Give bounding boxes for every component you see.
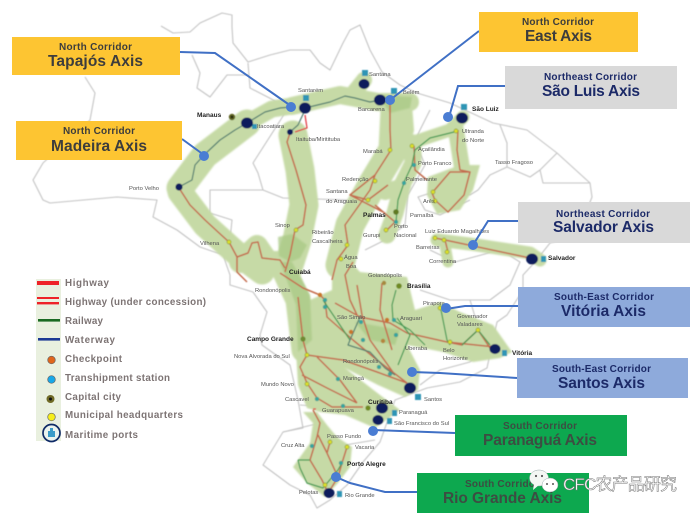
legend: maritime ports (43, 424, 139, 442)
place names: Cuiabá (289, 269, 311, 276)
highways (179, 102, 530, 493)
label: Madeira Axis: North Corridor (63, 126, 135, 137)
label: Paranaguá Axis: South Corridor (503, 421, 577, 432)
small red highway stub (295, 115, 316, 409)
place names: Parnaíba (410, 213, 434, 219)
place names: Nova Alvorada do Sul (234, 354, 290, 360)
place names: Passo Fundo (327, 434, 361, 440)
legend: highway: Highway (65, 278, 110, 289)
place names: Brasília (407, 283, 431, 290)
legend: waterway (38, 335, 116, 346)
place names: São Francisco do Sul (394, 421, 449, 427)
place names: Cascavel (285, 397, 309, 403)
label: Salvador Axis: Northeast Corridor (556, 209, 650, 220)
label: Paranaguá Axis: Paranaguá Axis (483, 432, 597, 449)
label: Rio Grande Axis: South Corridor (465, 479, 539, 490)
place names: Palmas (363, 212, 386, 219)
label: Madeira Axis (16, 121, 182, 160)
place names: São Simão (337, 315, 365, 321)
place names: Porto Franco (418, 161, 452, 167)
transhipment dots (310, 163, 416, 465)
legend: highway under concession: Highway (under concession) (65, 297, 206, 308)
place names: Boa (346, 264, 357, 270)
label: Paranaguá Axis (455, 415, 627, 456)
place names: Campo Grande (247, 336, 294, 343)
place names: Horizonte (443, 356, 468, 362)
place names: Vacaria (355, 445, 375, 451)
place names: Valadares (457, 322, 483, 328)
place names: Paranaguá (399, 410, 428, 416)
place names: Belo (443, 348, 455, 354)
place names: Itaituba/Miritituba (296, 137, 341, 143)
state borders (33, 13, 592, 508)
watermark text: CFC农产品研究 (563, 475, 677, 494)
place names: Goiandópolis (368, 273, 402, 279)
legend: municipal headquarters: Municipal headquarters (65, 410, 184, 421)
legend: capital city: Capital city (65, 392, 122, 403)
label: Santos Axis: Santos Axis (558, 375, 645, 392)
place names: Vitória (512, 350, 532, 357)
legend: checkpoint: Checkpoint (65, 354, 123, 365)
navy port dots (175, 79, 538, 498)
place names: Rio Grande (345, 493, 375, 499)
place names: Itacoatiara (257, 124, 285, 130)
label: East Axis: East Axis (525, 28, 592, 45)
map of Brazil (33, 13, 592, 508)
place names: Sinop (275, 223, 290, 229)
municipal dots (227, 129, 480, 487)
place names: Governador (457, 314, 488, 320)
place names: Porto Velho (129, 186, 159, 192)
place names: São Luiz (472, 106, 499, 113)
corridor bands (180, 80, 540, 497)
label: Tapajós Axis: Tapajós Axis (48, 53, 143, 70)
label: São Luis Axis (505, 66, 677, 109)
connector lines (180, 31, 518, 492)
label: Tapajós Axis (12, 37, 180, 75)
label: São Luis Axis: Northeast Corridor (544, 72, 637, 83)
place names: Porto (394, 224, 408, 230)
place names: Correntina (429, 259, 457, 265)
place names: Pelotas (299, 490, 318, 496)
place names: Cascalheira (312, 239, 343, 245)
legend: highway (37, 278, 110, 289)
place names: Ribeirão (312, 230, 334, 236)
place names: Rondonópolis (343, 359, 379, 365)
legend: railway: Railway (65, 316, 104, 327)
place names: Santana (326, 189, 348, 195)
place names: Guarapuava (322, 408, 355, 414)
place names: Açailândia (418, 147, 446, 153)
place names: Manaus (197, 112, 222, 119)
place names: Araguari (400, 316, 422, 322)
place names: Nacional (394, 233, 417, 239)
place names: do Norte (462, 138, 484, 144)
place names: Rondonópolis (255, 288, 291, 294)
place names: Maringá (343, 376, 365, 382)
label: Rio Grande Axis (417, 473, 589, 513)
railways (298, 131, 490, 488)
place names: Marabá (363, 149, 383, 155)
label: Santos Axis (517, 358, 688, 398)
place names: Mundo Novo (261, 382, 294, 388)
label: Vitória Axis (518, 287, 690, 327)
legend: railway (38, 316, 104, 327)
place names: Barreiras (416, 245, 440, 251)
place names: Santana (369, 72, 391, 78)
label: Vitória Axis: South-East Corridor (554, 292, 654, 303)
label: East Axis: North Corridor (522, 17, 594, 28)
place names: Tasso Fragoso (495, 160, 533, 166)
place names: Salvador (548, 255, 576, 262)
label: East Axis (479, 12, 638, 52)
place names: Arês (423, 199, 435, 205)
place names: Vilhena (200, 241, 220, 247)
place names: Ultranda (462, 129, 485, 135)
place names: Porto Alegre (347, 461, 386, 468)
place names: Curitiba (368, 399, 393, 406)
legend: waterway: Waterway (65, 335, 116, 346)
place names: Cruz Alta (281, 443, 305, 449)
place names: do Araguaia (326, 199, 358, 205)
label: São Luis Axis: São Luis Axis (542, 83, 640, 100)
place names: Redenção (342, 177, 368, 183)
place names: Água (344, 254, 358, 261)
label: Salvador Axis (518, 202, 690, 243)
connector dots (199, 95, 478, 482)
label: Salvador Axis: Salvador Axis (553, 219, 654, 236)
label: Santos Axis: South-East Corridor (552, 364, 651, 375)
label: Tapajós Axis: North Corridor (59, 42, 132, 53)
place names: Uberaba (405, 346, 428, 352)
place names: Barcarena (358, 107, 386, 113)
place names: Santarém (298, 88, 323, 94)
place names: Santos (424, 397, 442, 403)
label: Madeira Axis: Madeira Axis (51, 138, 147, 155)
place names: Luiz Eduardo Magalhães (425, 229, 489, 235)
place names (129, 72, 576, 499)
darker overlaps (278, 95, 412, 352)
label: Vitória Axis: Vitória Axis (561, 303, 646, 320)
checkpoint and capital dots (229, 114, 402, 411)
waterways (179, 96, 395, 375)
place names: Palmeirante (406, 177, 437, 183)
maritime port markers (252, 70, 546, 497)
legend: maritime ports: Maritime ports (65, 430, 139, 441)
legend: transhipment station: Transhipment station (65, 373, 170, 384)
legend (36, 278, 206, 442)
place names: Belém (403, 90, 420, 96)
watermark icon (530, 470, 558, 492)
label: Rio Grande Axis: Rio Grande Axis (443, 490, 562, 507)
place names: Gurupi (363, 233, 380, 239)
place names: Pirapora (423, 301, 446, 307)
